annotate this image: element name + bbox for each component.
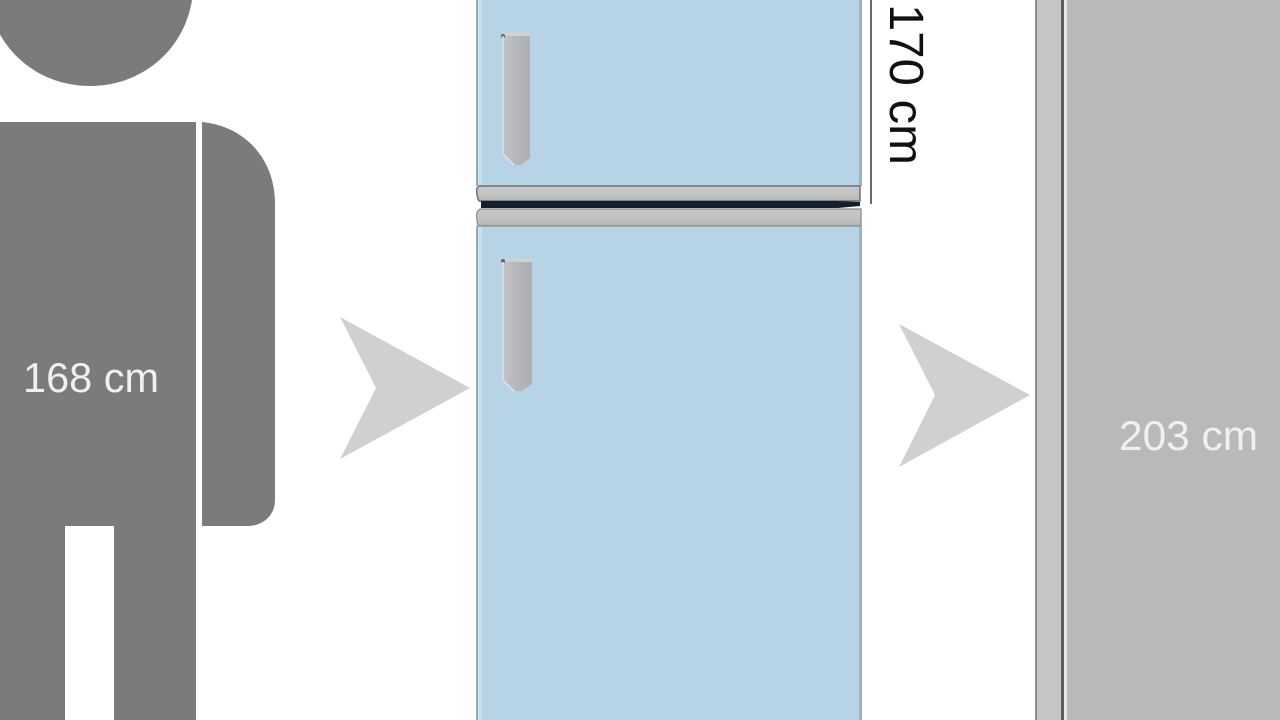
fridge height label: 170 cm [879,4,932,165]
fridge dimension line [870,0,872,204]
fridge lower trim [477,209,861,226]
person silhouette [0,0,275,720]
person height label: 168 cm [23,354,159,401]
fridge lower door [476,226,862,720]
arrow: fridge to door [899,324,1030,467]
door panel [1067,0,1280,720]
lower door handle [501,258,532,391]
person arm [202,122,275,526]
person torso and legs [0,122,196,720]
fridge gap [481,201,860,208]
upper door handle [501,32,530,165]
fridge left edge [476,0,478,720]
fridge [476,0,862,720]
door frame [1037,0,1061,720]
door [1035,0,1280,720]
door height label: 203 cm [1119,412,1258,459]
fridge upper trim [477,186,860,201]
fridge upper door [476,0,862,186]
arrow: person to fridge [340,317,470,459]
fridge right edge [859,0,862,720]
person head [0,0,192,86]
